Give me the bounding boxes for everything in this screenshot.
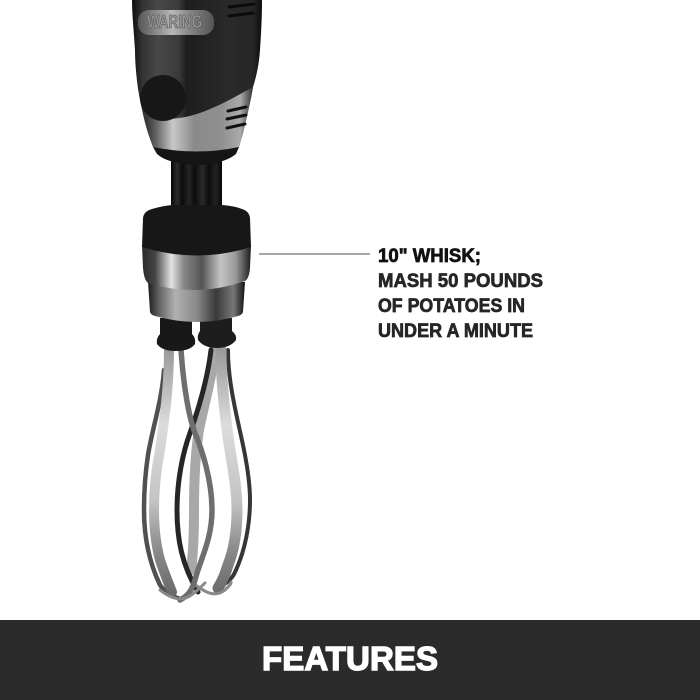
footer banner xyxy=(0,620,700,700)
black coupling xyxy=(142,205,251,256)
whisk attachment product photo xyxy=(132,0,262,600)
ribbed neck xyxy=(171,160,222,210)
right whisk socket xyxy=(198,318,236,348)
black lower skirt xyxy=(153,147,239,165)
lower vents xyxy=(227,107,246,128)
steel motor band xyxy=(146,87,253,152)
callout leader line xyxy=(259,253,370,255)
footer heading: FEATURES xyxy=(262,640,438,677)
callout text: MASH 50 POUNDS xyxy=(378,271,543,292)
whisk loops xyxy=(144,350,250,600)
left whisk socket xyxy=(157,318,195,351)
logo badge: WARING xyxy=(147,12,202,32)
motor body xyxy=(132,0,262,152)
callout text: UNDER A MINUTE xyxy=(378,321,533,342)
callout text: 10" WHISK; xyxy=(378,246,481,267)
callout text: OF POTATOES IN xyxy=(378,296,525,317)
power button xyxy=(140,75,186,121)
lower steel collar xyxy=(148,282,245,322)
logo badge xyxy=(138,10,214,35)
upper steel collar xyxy=(142,245,251,290)
callout text xyxy=(378,246,543,342)
top vents xyxy=(229,4,254,16)
